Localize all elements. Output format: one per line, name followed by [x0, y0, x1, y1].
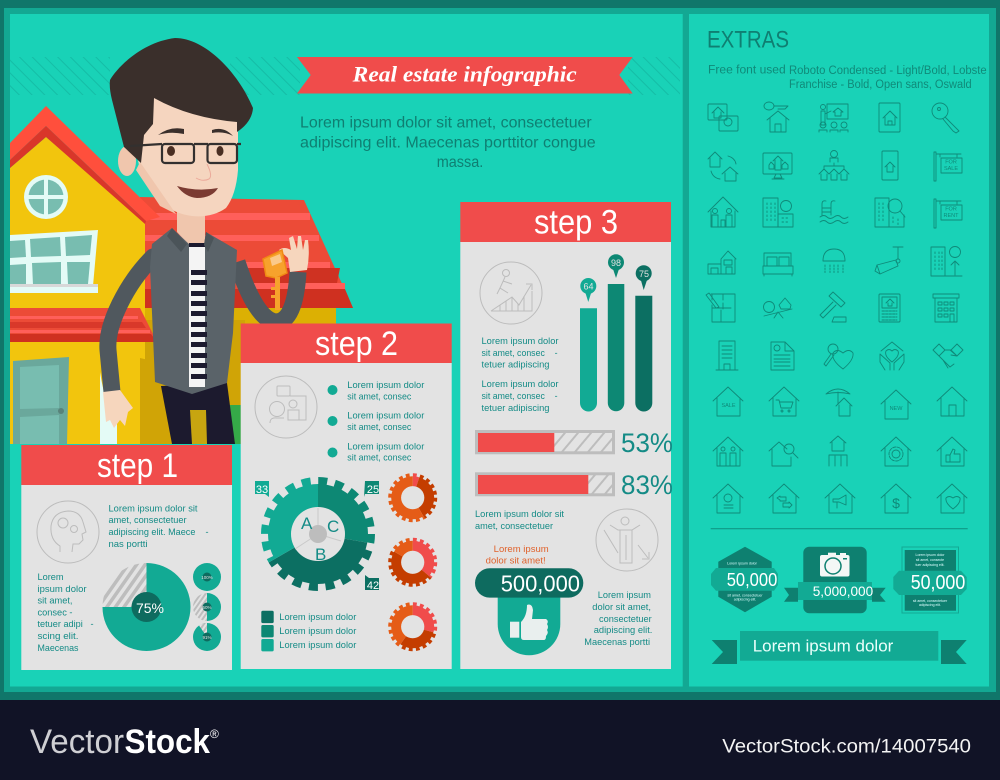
- bullet list: [328, 380, 424, 464]
- hatched band: [10, 57, 680, 95]
- eyebrows: [158, 128, 233, 136]
- bullet list: sit amet, consec: [347, 422, 412, 433]
- text block: Lorem ipsum dolor: [482, 336, 558, 347]
- icon: camera: [820, 553, 850, 576]
- bullet list: sit amet, consec: [347, 392, 412, 402]
- text block: sit amet, consec -: [482, 391, 558, 402]
- pin: 64: [580, 278, 596, 302]
- text block: dolor sit amet,: [592, 602, 651, 613]
- front house: [10, 106, 172, 444]
- badge: square 50,000: [893, 547, 967, 613]
- icon: hierarchy: [819, 150, 849, 180]
- icon: tablet house: [879, 103, 900, 132]
- glasses: [130, 144, 241, 163]
- banner: Lorem ipsum dolor: [753, 637, 894, 656]
- icon: pool: [820, 201, 848, 224]
- text block: tetuer adipiscing: [482, 403, 550, 414]
- banner: [712, 631, 967, 664]
- thumbs up badge: [475, 568, 583, 655]
- icon: umbrella house: [826, 389, 852, 416]
- tag: 25: 25: [367, 484, 379, 496]
- bullet list: Lorem ipsum dolor: [347, 441, 424, 452]
- icon: house dollar: [881, 484, 911, 513]
- panel: step 3: [460, 202, 673, 669]
- icon: house sale: SALE: [721, 403, 736, 409]
- mouth: [177, 186, 218, 198]
- icon: house megaphone: [825, 484, 855, 513]
- intro text: adipiscing elit. Maecenas porttitor congue: [300, 134, 596, 151]
- text block: amet, consectetuer: [475, 521, 553, 532]
- icon: house family: [713, 437, 743, 466]
- callout text: dolor sit amet!: [486, 556, 546, 566]
- pin: 98: [608, 254, 624, 278]
- door: [13, 357, 69, 444]
- legend: Lorem ipsum dolor: [279, 640, 356, 651]
- round window: [24, 175, 68, 219]
- icon: key and heart: [824, 344, 853, 369]
- panel: extras: [706, 26, 987, 664]
- text block: Lorem ipsum dolor sit: [108, 504, 198, 514]
- icon: handshake: [933, 344, 963, 368]
- illustration: houses: [10, 106, 353, 444]
- text block: scing elit.: [38, 631, 78, 642]
- icon: office tower: [716, 341, 738, 370]
- text block: Maecenas portti: [584, 637, 650, 648]
- badge: hexagon 50,000: sit amet, consectetuer: [727, 594, 763, 598]
- text block: Lorem ipsum dolor: [482, 379, 558, 390]
- badge: square 50,000: adipiscing elit.: [919, 603, 941, 607]
- font credits: Roboto Condensed - Light/Bold, Lobste: [789, 65, 987, 77]
- gear chart: [255, 474, 379, 594]
- left hand: [103, 390, 133, 428]
- badge: square 50,000: tuer adipiscing elit.: [916, 563, 945, 567]
- title ribbon: Real estate infographic: [352, 62, 577, 87]
- icon: building with coin: [763, 198, 793, 227]
- text block: [482, 336, 558, 414]
- logo: VectorStock: Stock: [124, 723, 210, 761]
- icon: house cart: [769, 387, 799, 416]
- gear chart: B: [315, 545, 326, 564]
- text block: Lorem ipsum dolor sit: [475, 509, 564, 520]
- bullet list: Lorem ipsum dolor: [347, 411, 424, 422]
- intro text: massa.: [437, 154, 483, 171]
- gear chart: A: [301, 514, 313, 533]
- small pies: 100%: [201, 575, 213, 580]
- icon: house search: [769, 442, 798, 466]
- gear chart: C: [327, 517, 339, 536]
- icon: gavel: [820, 292, 846, 322]
- text block: [108, 504, 208, 550]
- text block: adipiscing elit.: [594, 625, 652, 636]
- icon: for sale sign: SALE: [944, 166, 958, 172]
- icon: monitor houses: [763, 153, 792, 179]
- right hand: [279, 236, 309, 272]
- text block: tetuer adipi -: [38, 619, 94, 630]
- panel: step 2: [241, 324, 452, 669]
- tag: 33: 33: [256, 484, 268, 496]
- icon: phone house: [882, 151, 898, 180]
- tag: 42: 42: [367, 580, 379, 592]
- collar: [167, 228, 214, 252]
- text block: ipsum dolor: [38, 584, 86, 595]
- trousers: [161, 383, 235, 444]
- font credits: Franchise - Bold, Open sans, Oswald: [789, 79, 972, 91]
- legend: [261, 611, 356, 651]
- icon: house heart: [937, 484, 967, 513]
- icon: businessman with falling arrow: [596, 509, 658, 571]
- text block: sit amet, consec -: [482, 348, 558, 359]
- bar chart: [580, 254, 652, 412]
- icon: family house: [708, 197, 738, 227]
- pie chart 75%: [102, 563, 190, 651]
- badge: camera 5,000,000: [784, 547, 886, 613]
- icon: house new: [881, 390, 911, 419]
- icon: for sale sign: [934, 152, 962, 181]
- text block: tetuer adipiscing: [482, 360, 550, 370]
- progress bar 83%: 83%: [621, 470, 673, 500]
- logo: VectorStock: ®: [210, 727, 219, 741]
- text block: adipiscing elit. Maece -: [108, 527, 208, 538]
- legend: Lorem ipsum dolor: [279, 612, 356, 623]
- icon: house money gear: [881, 437, 911, 466]
- heading: extras: EXTRAS: [707, 26, 789, 53]
- icon: house exchange: [708, 152, 738, 181]
- icon: hands heart: [880, 342, 904, 370]
- badge: camera 5,000,000: 5,000,000: [813, 583, 873, 599]
- icon: agent with speech bubbles: [255, 376, 317, 438]
- heading: step 1: step 1: [97, 447, 178, 485]
- key: [263, 250, 287, 310]
- icon: house dollar: $: [892, 495, 900, 511]
- badge: hexagon 50,000: [711, 547, 778, 612]
- font credits: [708, 64, 987, 91]
- text block: [584, 590, 652, 648]
- icon: price scale: [764, 298, 792, 318]
- icon: apartment block: [933, 294, 959, 322]
- progress bar 53%: [476, 428, 673, 458]
- small pies: 50%: [202, 605, 212, 610]
- callout text: Lorem ipsum: [494, 544, 549, 555]
- icon: bed: [763, 253, 793, 276]
- intro text: [300, 114, 596, 171]
- icon: person with house head: [829, 436, 847, 466]
- progress bar 83%: [476, 470, 673, 500]
- text block: Maecenas: [38, 643, 79, 654]
- bullet list: Lorem ipsum dolor: [347, 380, 424, 391]
- icon: document: [771, 342, 794, 370]
- text block: Lorem ipsum: [598, 590, 651, 601]
- icon: house like: [937, 437, 967, 466]
- hair: [110, 38, 253, 163]
- icon: garage house: [708, 251, 736, 274]
- heading: step 3: step 3: [534, 204, 618, 242]
- jacket: [150, 228, 237, 394]
- icon: thumb up: [510, 605, 548, 640]
- icon: house new: NEW: [890, 406, 903, 412]
- icon: running man and growth chart: [480, 262, 542, 324]
- icon: for rent sign: FOR: [945, 206, 957, 212]
- nose: [196, 164, 211, 180]
- pin: 75: 75: [639, 269, 649, 279]
- ear: [118, 146, 136, 176]
- icon: key and house: [764, 102, 789, 132]
- icon: calculator: [879, 294, 900, 322]
- icon: house transfer: [769, 484, 799, 513]
- intro text: Lorem ipsum dolor sit amet, consectetuer: [300, 114, 592, 131]
- icon: presentation: [819, 104, 848, 132]
- right arm: [237, 262, 298, 322]
- logo: VectorStock: Vector: [30, 723, 124, 761]
- bullet list: sit amet, consec: [347, 453, 412, 464]
- badge: hexagon 50,000: adipiscing elit.: [734, 598, 756, 602]
- eyes: [167, 146, 224, 156]
- badge: square 50,000: sit amet, consectetuer: [913, 599, 948, 603]
- badge: square 50,000: 50,000: [911, 572, 965, 594]
- icon: floor plan: [706, 293, 735, 322]
- text block: [475, 509, 564, 532]
- callout text: [486, 544, 549, 566]
- icon: for rent sign: RENT: [944, 213, 959, 219]
- icon: security camera: [875, 247, 903, 274]
- big window: [10, 230, 98, 293]
- badge: hexagon 50,000: 50,000: [727, 570, 777, 590]
- icon: tower price: [931, 246, 962, 276]
- character: [103, 38, 309, 444]
- icon: plain house: [937, 387, 967, 416]
- footer bar: [0, 700, 1000, 780]
- small pies: [193, 563, 221, 651]
- text block: [38, 572, 94, 654]
- badge: hexagon 50,000: Lorem ipsum dolor: [727, 562, 758, 566]
- face: [130, 92, 238, 216]
- bush: [190, 405, 241, 444]
- icon: building search: [875, 198, 905, 227]
- icon: house sale: [713, 387, 743, 416]
- pie chart 75%: 75%: [136, 600, 164, 616]
- legend: Lorem ipsum dolor: [279, 626, 356, 637]
- heading: step 2: step 2: [315, 325, 398, 363]
- small gear 2: [387, 536, 439, 588]
- icon: house chat: [708, 104, 738, 131]
- shirt: [189, 243, 207, 387]
- icon: head with gears: [37, 501, 99, 563]
- title ribbon: [297, 57, 633, 94]
- icon: key: [932, 103, 959, 133]
- small gear 1: [387, 472, 439, 524]
- back house: [135, 197, 353, 444]
- pin: 75: [636, 265, 652, 290]
- logo: VectorStock: [30, 723, 219, 761]
- text block: consectetuer: [599, 614, 652, 625]
- small pies: 91%: [202, 635, 212, 640]
- progress bar 53%: 53%: [621, 428, 673, 458]
- icon: shower: [823, 249, 845, 273]
- pin: 64: 64: [583, 282, 594, 292]
- text block: nas portti: [108, 539, 148, 550]
- pin: 98: 98: [611, 258, 621, 268]
- small gear 3: [387, 601, 439, 652]
- font credits: Free font used: [708, 64, 786, 76]
- thumbs up badge: 500,000: [501, 571, 580, 597]
- icon: house coin: [713, 484, 743, 513]
- neck: [177, 212, 205, 246]
- image id: VectorStock.com/14007540: [722, 737, 971, 758]
- text block: sit amet,: [38, 596, 72, 606]
- icon: for rent sign: [934, 199, 962, 228]
- panel: step 1: [21, 445, 232, 670]
- text block: Lorem: [38, 572, 64, 583]
- text block: consec -: [38, 608, 72, 618]
- icon: for sale sign: FOR: [945, 160, 957, 166]
- badge: square 50,000: Lorem ipsum dolor: [916, 553, 945, 557]
- badge: square 50,000: sit amet, consecte: [916, 558, 944, 562]
- left arm: [108, 257, 153, 392]
- text block: amet, consectetuer: [108, 515, 186, 526]
